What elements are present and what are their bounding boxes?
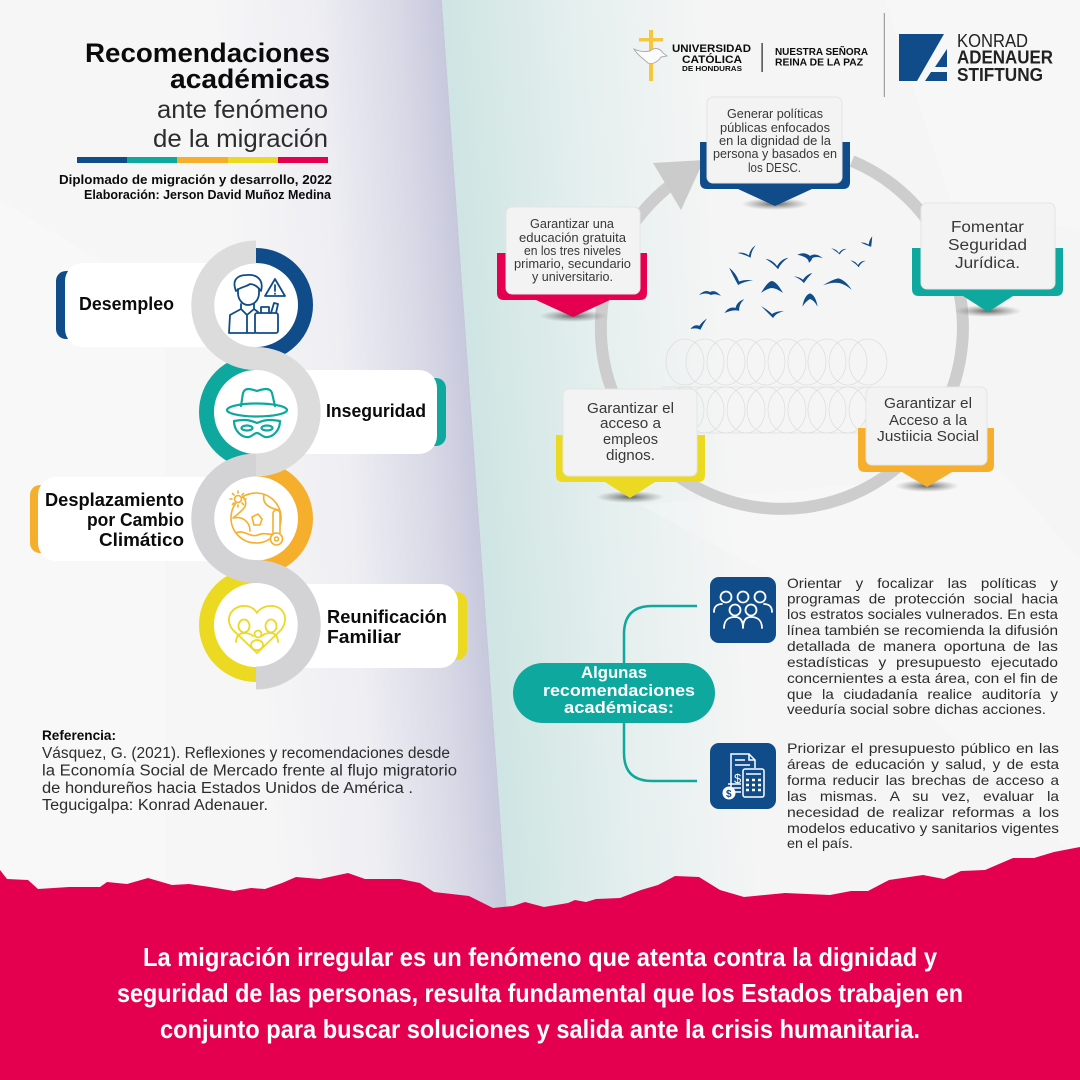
logo: Konrad Adenauer Stiftung: KONRAD	[957, 31, 1028, 51]
heading pill: Algunas recomendaciones académicas: recomendaciones	[543, 681, 695, 700]
callout: Garantizar educación (pink): primario, secundario	[514, 257, 631, 271]
logo: Universidad Católica: UNIVERSIDAD	[672, 43, 751, 55]
footer message: La migración irregular es un fenómeno que atenta contra la dignidad y	[143, 942, 937, 972]
icon: cross and dove	[634, 30, 667, 81]
icon: unemployed person	[229, 275, 285, 333]
callout: Garantizar justicia (orange): Garantizar el	[884, 396, 972, 412]
card: Inseguridad: Inseguridad	[326, 401, 426, 421]
icon: warming globe	[230, 491, 282, 545]
callout: Fomentar Seguridad Jurídica (teal): Seguridad	[948, 237, 1027, 254]
paragraph: protección social: estadísticas y presupuesto ejecutado	[787, 654, 1058, 670]
icon: family heart	[229, 606, 285, 653]
callout: Garantizar educación (pink): en los tres niveles	[524, 244, 621, 258]
paragraph: presupuesto público: Priorizar el presupuesto público en las	[787, 740, 1059, 756]
callout: Garantizar empleos (yellow): dignos.	[606, 448, 655, 464]
callout: Generar políticas (blue)	[700, 97, 850, 210]
reference text: Referencia:	[42, 727, 116, 743]
title: ante fenómeno	[157, 96, 328, 124]
title colour bar	[77, 157, 328, 163]
heading pill: Algunas recomendaciones académicas: Algunas	[581, 663, 647, 682]
paragraph: presupuesto público: necesidad de realizar reformas a los	[787, 804, 1059, 820]
paragraph: protección social: línea también se recomienda la difusión	[787, 622, 1058, 638]
footer message: conjunto para buscar soluciones y salida ante la crisis humanitaria.	[160, 1014, 920, 1044]
paragraph: protección social: detallada de manera oportuna de las	[787, 638, 1058, 654]
razor wire	[662, 339, 887, 433]
callout: Generar políticas (blue): públicas enfocados	[720, 121, 830, 135]
icon: social group	[710, 577, 776, 643]
card: Desempleo: Desempleo	[79, 293, 174, 314]
paragraph: presupuesto público: en el país.	[787, 835, 853, 851]
logo: Universidad Católica: NUESTRA SEÑORA	[775, 45, 868, 58]
callout: Fomentar Seguridad Jurídica (teal)	[912, 203, 1063, 317]
grey S ribbon	[203, 252, 309, 678]
card: Desplazamiento por Cambio Climático: Climático	[99, 530, 184, 550]
card: Desplazamiento por Cambio Climático	[30, 477, 255, 561]
card: Desplazamiento por Cambio Climático: Desplazamiento	[45, 490, 184, 510]
logo: Universidad Católica: DE HONDURAS	[682, 64, 742, 73]
callout: Garantizar empleos (yellow): empleos	[603, 432, 658, 448]
paragraph: protección social: veeduría social sobre dichas acciones.	[787, 701, 1046, 717]
card: Desplazamiento por Cambio Climático: por Cambio	[87, 510, 184, 530]
callout: Garantizar justicia (orange)	[858, 387, 994, 492]
card: Reunificación Familiar	[256, 584, 467, 668]
paragraph: protección social: concernientes a esta área, con el fin de	[787, 670, 1058, 686]
logo: Konrad Adenauer Stiftung: STIFTUNG	[957, 65, 1043, 85]
title: académicas	[170, 64, 330, 94]
logo: Universidad Católica: REINA DE LA PAZ	[775, 58, 863, 68]
callout: Fomentar Seguridad Jurídica (teal): Fomentar	[951, 219, 1024, 236]
card: Reunificación Familiar: Reunificación	[327, 607, 447, 627]
cycle ring with arrow	[601, 160, 963, 509]
paragraph: protección social	[787, 575, 1058, 717]
paragraph: presupuesto público: modelos educativo y sanitarios vigentes	[787, 820, 1059, 836]
paragraph: protección social: programas de protección social hacia	[787, 590, 1058, 606]
flock of birds	[689, 236, 876, 332]
card: Desempleo	[56, 263, 255, 347]
heading pill: Algunas recomendaciones académicas	[513, 663, 715, 723]
logo: Universidad Católica	[634, 30, 868, 81]
paragraph: protección social: los estratos sociales vulnerados. En esta	[787, 606, 1058, 622]
panel: causes S-curve	[30, 252, 467, 678]
logo: Konrad Adenauer Stiftung	[899, 31, 1053, 85]
background: left page	[0, 0, 507, 910]
callout: Garantizar empleos (yellow): acceso a	[600, 416, 662, 432]
title	[85, 38, 330, 153]
callout: Generar políticas (blue): persona y basados en	[713, 147, 837, 161]
background: right page	[442, 0, 1080, 910]
reference text: de hondureños hacia Estados Unidos de América .	[42, 780, 413, 797]
logo: Universidad Católica: CATÓLICA	[682, 53, 742, 66]
coloured half rings	[207, 256, 304, 674]
white icon discs	[214, 263, 298, 667]
reference text: Tegucigalpa: Konrad Adenauer.	[42, 797, 268, 814]
subtitle: Diplomado de migración y desarrollo, 2022	[59, 172, 332, 187]
icon: masked man with hat	[227, 389, 287, 437]
footer message: seguridad de las personas, resulta fundamental que los Estados trabajen en	[117, 978, 963, 1008]
icon: budget and calculator: $	[726, 789, 732, 800]
callout: Garantizar justicia (orange): Justiicia Social	[877, 429, 979, 445]
paragraph: presupuesto público: áreas de educación y salud, y de esta	[787, 756, 1059, 772]
reference text	[42, 727, 457, 814]
callout: Garantizar educación (pink): educación gratuita	[519, 231, 626, 245]
callout: Garantizar educación (pink): Garantizar una	[530, 217, 614, 231]
icon: budget and calculator: $	[734, 771, 742, 786]
heading pill: Algunas recomendaciones académicas: académicas:	[564, 698, 674, 717]
callout: Generar políticas (blue): los DESC.	[748, 161, 801, 175]
card: Reunificación Familiar: Familiar	[327, 627, 401, 647]
paragraph: presupuesto público: las mismas. A su vez, evaluar la	[787, 788, 1059, 804]
subtitle	[59, 172, 332, 202]
callout: Fomentar Seguridad Jurídica (teal): Jurídica.	[955, 255, 1020, 272]
callout: Generar políticas (blue): en la dignidad de la	[719, 134, 831, 148]
reference text: la Economía Social de Mercado frente al flujo migratorio	[42, 762, 457, 780]
paragraph: protección social: Orientar y focalizar las políticas y	[787, 575, 1058, 591]
title: Recomendaciones	[85, 38, 330, 68]
paragraph: protección social: que la ciudadanía realice auditoría y	[787, 686, 1058, 702]
paragraph: presupuesto público: forma reducir las brechas de acceso a	[787, 772, 1059, 788]
logo: Konrad Adenauer Stiftung: ADENAUER	[957, 48, 1053, 68]
callout: Garantizar justicia (orange): Acceso a la	[889, 413, 968, 429]
title: de la migración	[153, 125, 328, 153]
callout: Garantizar educación (pink)	[497, 207, 647, 322]
paragraph: presupuesto público	[787, 740, 1059, 851]
footer message	[117, 942, 963, 1044]
torn red footer band	[0, 847, 1080, 1080]
icon: budget and calculator	[710, 743, 776, 809]
connector lines	[624, 606, 697, 781]
reference text: Vásquez, G. (2021). Reflexiones y recomendaciones desde	[42, 745, 450, 762]
callout: Garantizar empleos (yellow)	[556, 389, 705, 503]
subtitle: Elaboración: Jerson David Muñoz Medina	[84, 188, 332, 202]
callout: Garantizar educación (pink): y universitario.	[532, 270, 613, 284]
callout: Garantizar empleos (yellow): Garantizar el	[587, 401, 674, 417]
card: Inseguridad	[256, 370, 446, 454]
callout: Generar políticas (blue): Generar políticas	[727, 107, 823, 121]
